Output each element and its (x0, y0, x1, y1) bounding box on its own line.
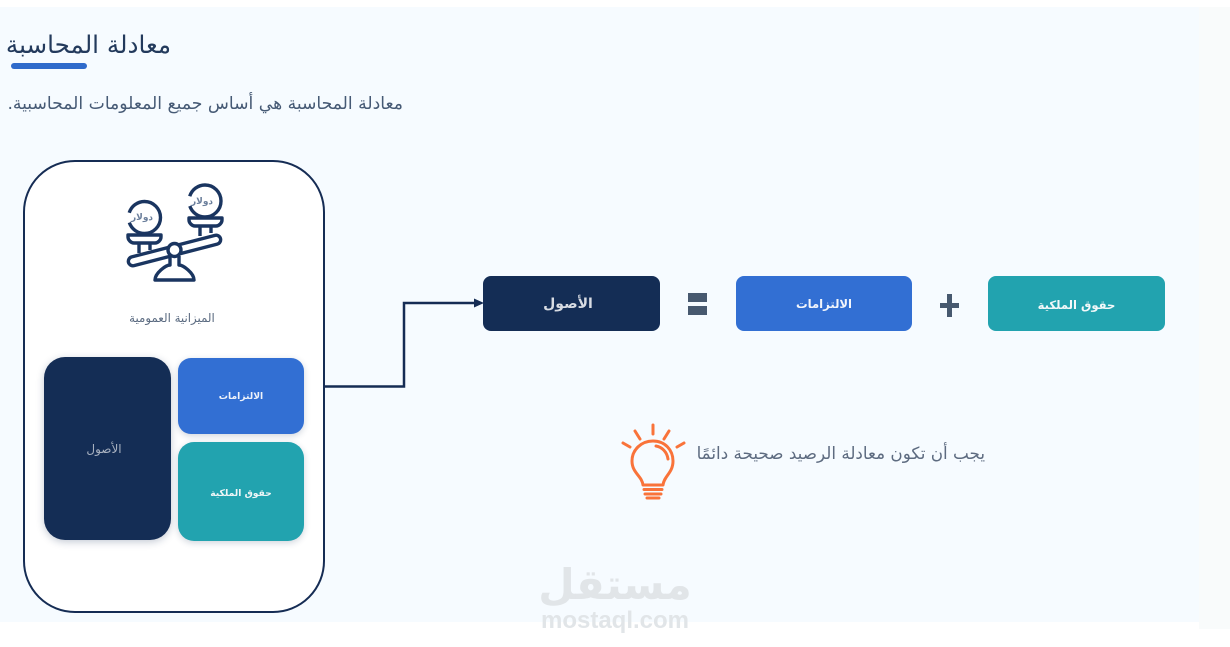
watermark arabic: مستقل (538, 560, 692, 609)
box: liabilities (736, 276, 912, 331)
block: assets (44, 357, 171, 540)
panel: balance sheet (23, 160, 325, 613)
icon: balance scale: دولار (130, 213, 153, 223)
title underline (11, 63, 87, 69)
box: assets: الأصول (543, 296, 593, 312)
arrow: sheet to assets (325, 298, 483, 388)
watermark (538, 560, 692, 634)
balance sheet label: الميزانية العمومية (129, 311, 215, 325)
icon: plus sign (940, 294, 959, 317)
icon: balance scale: دولار (190, 197, 213, 207)
note text: يجب أن تكون معادلة الرصيد صحيحة دائمًا (697, 443, 985, 463)
watermark latin: mostaql.com (541, 607, 689, 634)
block: liabilities (178, 358, 304, 434)
icon: balance scale (126, 183, 224, 282)
subtitle: معادلة المحاسبة هي أساس جميع المعلومات المحاسبية. (7, 94, 403, 114)
icon: equals sign (688, 293, 707, 315)
icon: light bulb (621, 424, 686, 500)
box: equity: حقوق الملكية (1038, 298, 1115, 312)
block: equity (178, 442, 304, 541)
block: assets: الأصول (86, 442, 122, 456)
box: assets (483, 276, 660, 331)
block: liabilities: الالتزامات (219, 390, 263, 402)
box: equity (988, 276, 1165, 331)
title: معادلة المحاسبة (6, 30, 171, 59)
block: equity: حقوق الملكية (210, 488, 272, 498)
box: liabilities: الالتزامات (796, 296, 852, 310)
right background strip (1199, 7, 1230, 629)
